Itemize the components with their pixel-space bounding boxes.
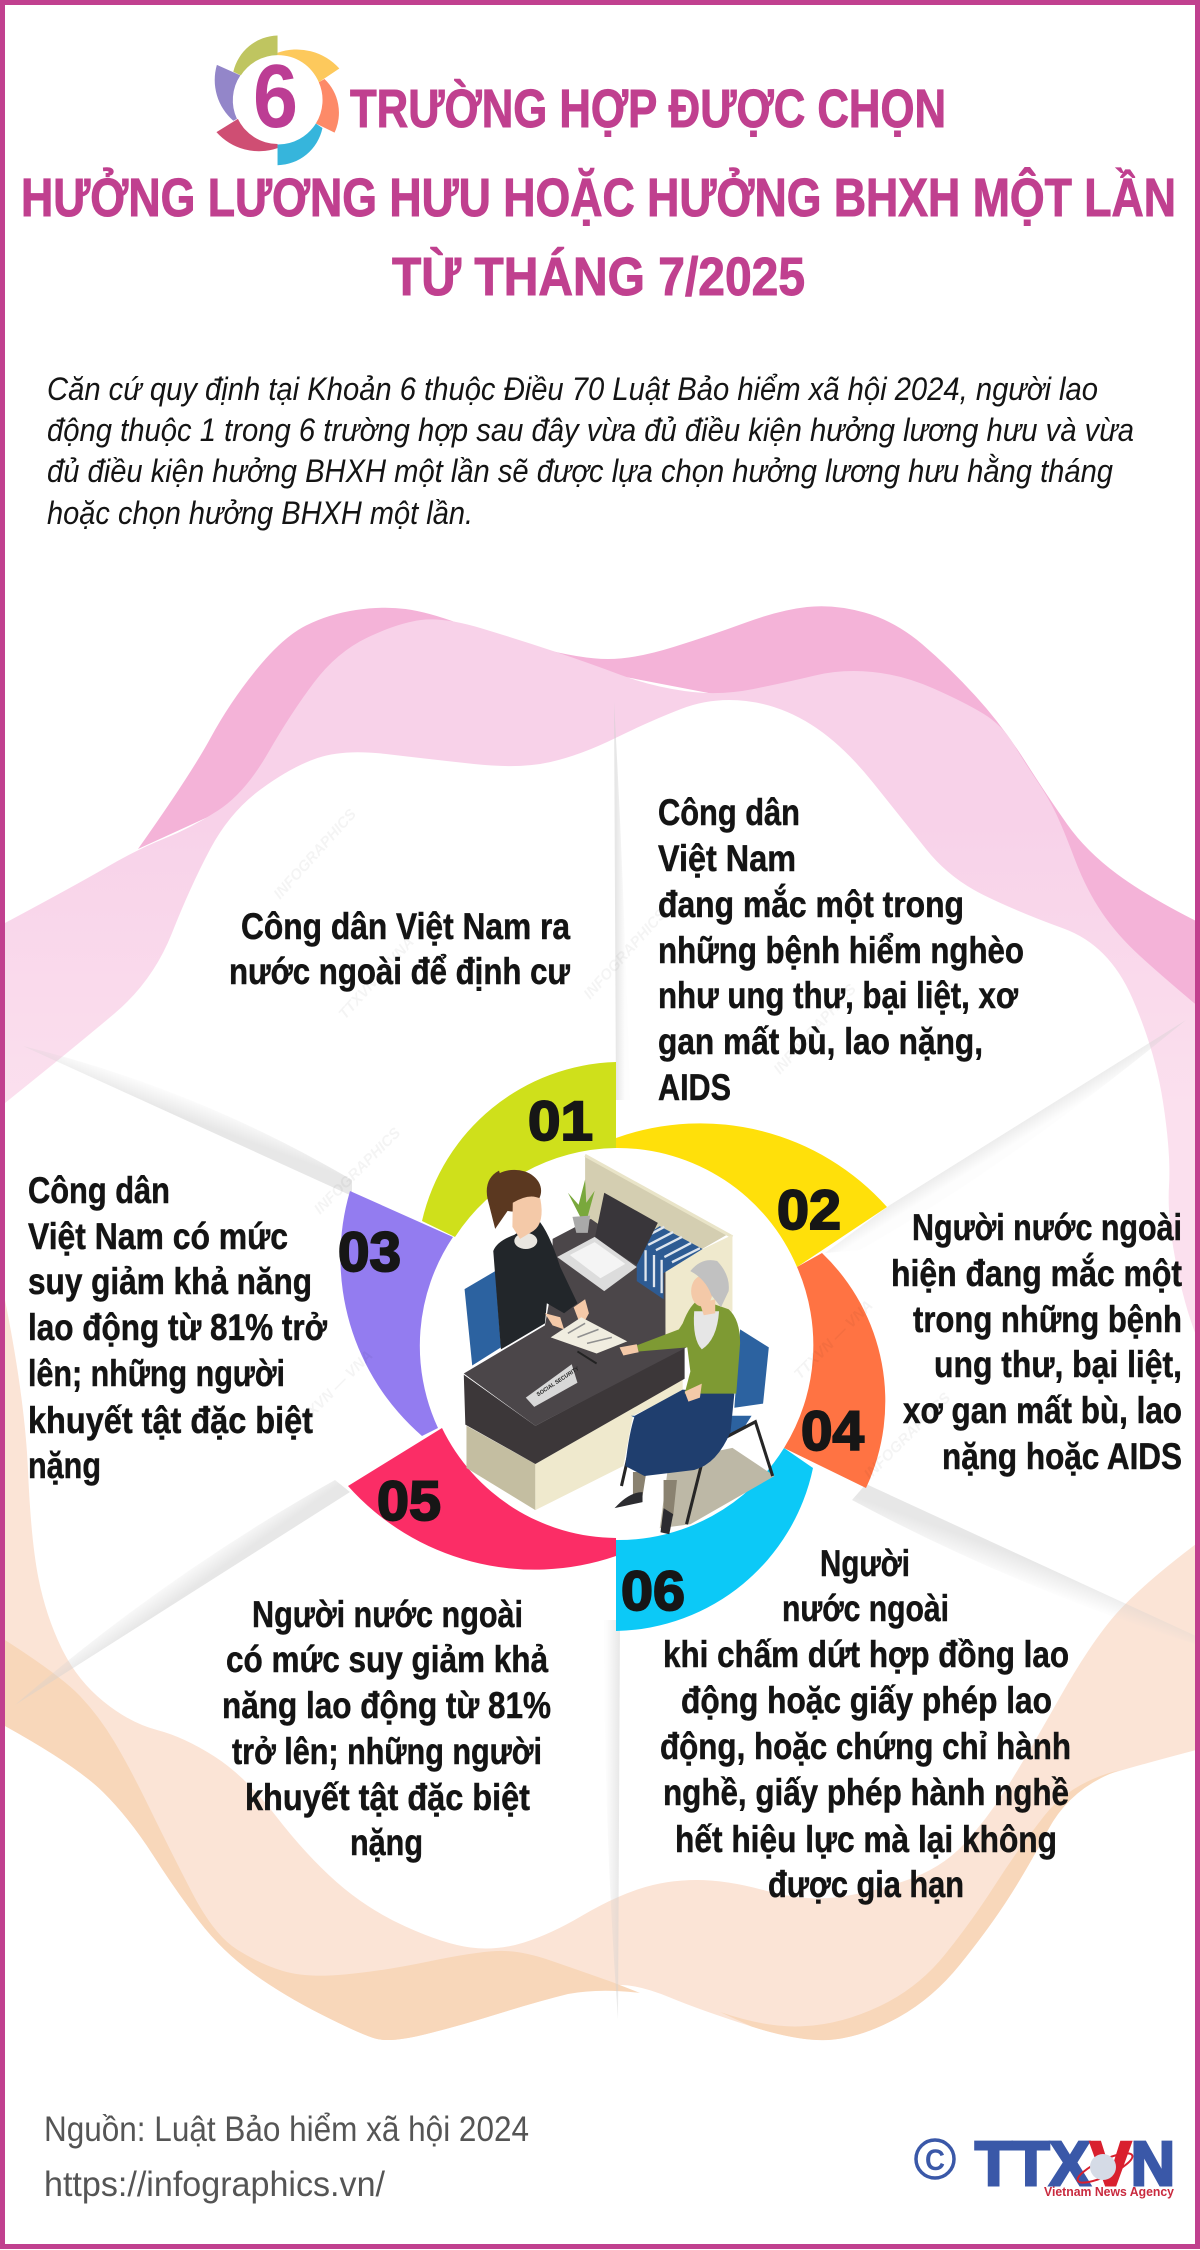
intro paragraph: Căn cứ quy định tại Khoản 6 thuộc Điều 70 Luật Bảo hiểm xã hội 2024, người lao xyxy=(47,371,1098,407)
segment 04: 04 xyxy=(801,1399,864,1462)
text: case 6: khi chấm dứt hợp đồng lao xyxy=(663,1634,1069,1675)
text: case 6 xyxy=(660,1543,1071,1905)
text: case 5: năng lao động từ 81% xyxy=(222,1685,551,1726)
plant xyxy=(568,1179,595,1233)
ring diagram with numbered segments xyxy=(338,1062,887,1631)
text: case 6: nước ngoài xyxy=(782,1588,949,1629)
text: case 3: suy giảm khả năng xyxy=(28,1261,312,1302)
intro paragraph: hoặc chọn hưởng BHXH một lần. xyxy=(47,495,473,531)
text: case 5: nặng xyxy=(350,1822,423,1863)
text: case 3: lao động từ 81% trở xyxy=(28,1307,328,1348)
laptop xyxy=(557,1193,658,1291)
visitor xyxy=(615,1260,773,1534)
segment 01 xyxy=(422,1062,616,1237)
text: case 5: Người nước ngoài xyxy=(252,1594,523,1635)
segment 02 xyxy=(616,1123,887,1267)
clerk xyxy=(465,1170,589,1366)
source note: Nguồn: Luật Bảo hiểm xã hội 2024 xyxy=(44,2110,529,2149)
segment 05 xyxy=(348,1428,616,1570)
segment 04 xyxy=(784,1253,885,1488)
background wave: orange xyxy=(5,1300,1200,2040)
icon: globe xyxy=(1074,2148,1136,2188)
side panel xyxy=(665,1235,732,1347)
copyright and TTXVN logo: TTXVN xyxy=(975,2130,1175,2199)
faint watermarks: TTXVN — VNA xyxy=(791,1297,877,1383)
faint watermarks: INFOGRAPHICS xyxy=(270,806,360,903)
name plate: SOCIAL SECURITY xyxy=(536,1366,581,1398)
text: case 2: như ung thư, bại liệt, xơ xyxy=(658,975,1019,1016)
text: case 3: Việt Nam có mức xyxy=(28,1216,288,1257)
text: case 1: Công dân Việt Nam ra xyxy=(241,906,570,947)
segment 01: 01 xyxy=(528,1089,593,1152)
text: case 6: Người xyxy=(820,1543,910,1584)
faint watermarks: TTXVN — VNA xyxy=(291,1347,377,1433)
faint watermarks: INFOGRAPHICS xyxy=(311,1124,404,1218)
text: case 5: có mức suy giảm khả xyxy=(226,1639,548,1680)
icon: copyright xyxy=(916,2140,954,2178)
text: case 2 xyxy=(658,792,1024,1108)
text: case 3 xyxy=(28,1170,328,1486)
text: case 6: hết hiệu lực mà lại không xyxy=(675,1819,1057,1860)
text: case 2: AIDS xyxy=(658,1067,731,1108)
icon: six-petal logo: 6 xyxy=(253,47,298,147)
text: case 3: lên; những người xyxy=(28,1353,285,1394)
title: TRƯỜNG HỢP ĐƯỢC CHỌN xyxy=(350,79,946,139)
icon: copyright: C xyxy=(925,2144,945,2177)
text: case 3: nặng xyxy=(28,1445,101,1486)
title: TỪ THÁNG 7/2025 xyxy=(392,247,805,307)
intro paragraph: đủ điều kiện hưởng BHXH một lần sẽ được lựa chọn hưởng lương hưu hằng tháng xyxy=(47,453,1113,489)
source note: https://infographics.vn/ xyxy=(44,2165,385,2204)
central illustration: clerk and elderly woman at a social security desk xyxy=(464,1155,775,1534)
icon: six-petal logo xyxy=(215,35,339,165)
text: case 6: được gia hạn xyxy=(768,1864,964,1905)
fold shadows radiating from the ring xyxy=(15,702,1198,2019)
faint watermarks: INFOGRAPHICS xyxy=(580,906,670,1003)
intro paragraph xyxy=(47,371,1134,531)
text: case 1 xyxy=(229,906,570,992)
text: case 6: nghề, giấy phép hành nghề xyxy=(663,1772,1069,1813)
text: case 6: động hoặc giấy phép lao xyxy=(681,1680,1052,1721)
desk xyxy=(464,1219,687,1510)
text: case 5: khuyết tật đặc biệt xyxy=(245,1777,530,1818)
text: case 5 xyxy=(222,1594,551,1863)
segment 03: 03 xyxy=(338,1220,401,1283)
segment 06 xyxy=(616,1448,813,1631)
name plate xyxy=(526,1364,581,1407)
text: case 2: Việt Nam xyxy=(658,838,796,879)
text: case 4 xyxy=(891,1207,1182,1477)
faint watermarks xyxy=(270,806,954,1483)
faint watermarks: TTXVN — VNA xyxy=(335,934,418,1023)
background wave: pink xyxy=(5,606,1200,1345)
segment 03 xyxy=(338,1191,453,1436)
faint watermarks: INFOGRAPHICS xyxy=(770,981,860,1078)
source note xyxy=(44,2110,529,2204)
text: case 2: đang mắc một trong xyxy=(658,883,964,925)
text: case 6: động, hoặc chứng chỉ hành xyxy=(660,1726,1071,1767)
back panel xyxy=(585,1155,727,1319)
text: case 5: trở lên; những người xyxy=(232,1731,542,1772)
text: case 2: Công dân xyxy=(658,792,800,833)
title xyxy=(21,35,1176,307)
text: case 3: Công dân xyxy=(28,1170,170,1211)
text: case 1: nước ngoài để định cư xyxy=(229,951,570,992)
text: case 2: gan mất bù, lao nặng, xyxy=(658,1021,983,1062)
segment 02: 02 xyxy=(777,1178,841,1241)
text: case 2: những bệnh hiểm nghèo xyxy=(658,930,1024,971)
segment 05: 05 xyxy=(377,1469,441,1532)
segment 06: 06 xyxy=(621,1559,685,1622)
copyright and TTXVN logo: Vietnam News Agency xyxy=(1044,2184,1175,2199)
document xyxy=(551,1317,627,1363)
faint watermarks: INFOGRAPHICS xyxy=(861,1389,954,1483)
text: case 3: khuyết tật đặc biệt xyxy=(28,1400,313,1441)
binders xyxy=(637,1226,703,1299)
